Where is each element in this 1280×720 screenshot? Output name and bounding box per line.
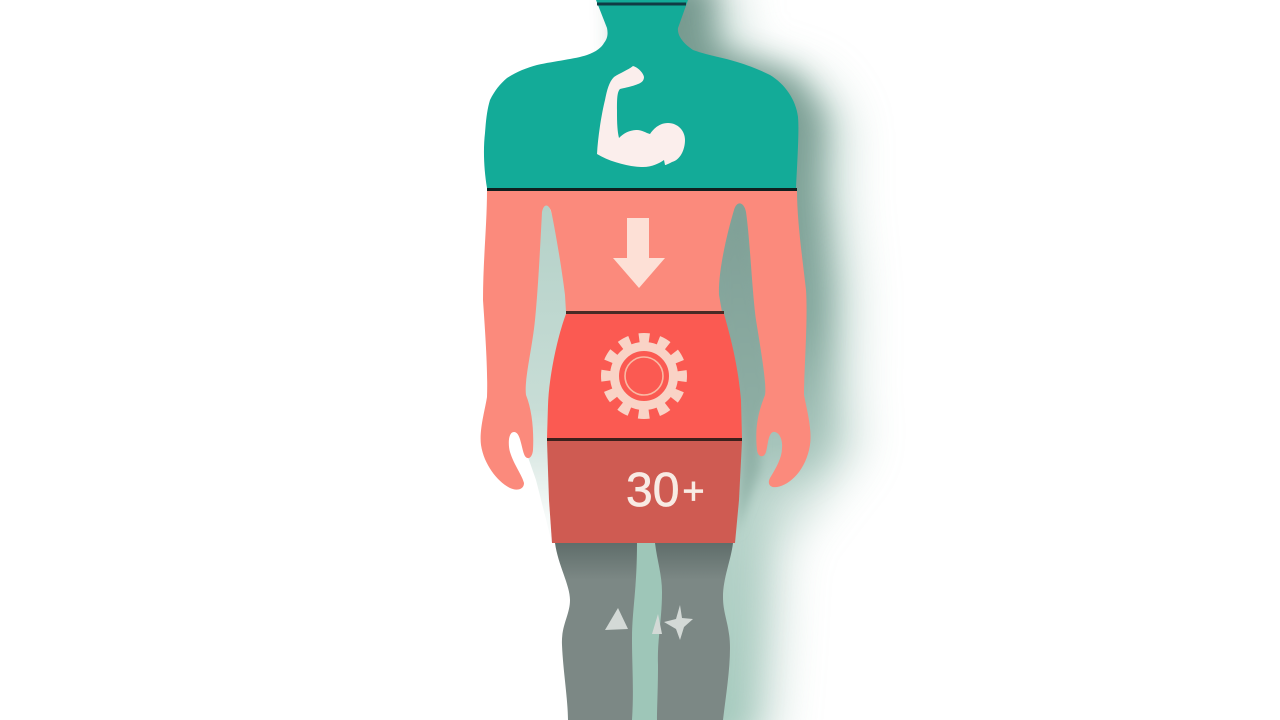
icon: down arrow xyxy=(613,218,665,288)
neck line xyxy=(597,2,686,6)
icon: flexed bicep xyxy=(597,66,685,167)
hip line xyxy=(547,438,742,441)
chest divider line xyxy=(487,188,797,191)
legs xyxy=(555,543,733,720)
lower abdomen section, dark red xyxy=(547,441,742,543)
icon: leg star xyxy=(664,605,693,640)
drop shadow of the figure xyxy=(515,0,860,720)
icon: gear xyxy=(608,340,680,412)
label: 30+: + xyxy=(682,471,705,513)
label: 30+: 30 xyxy=(626,464,679,517)
arms and upper abdomen salmon section xyxy=(481,190,811,490)
mid abdomen section, red xyxy=(547,314,742,438)
chest section, teal xyxy=(484,0,798,188)
icon: small triangle xyxy=(652,614,662,634)
icon: leg triangle xyxy=(605,608,628,630)
waist line xyxy=(566,311,724,314)
